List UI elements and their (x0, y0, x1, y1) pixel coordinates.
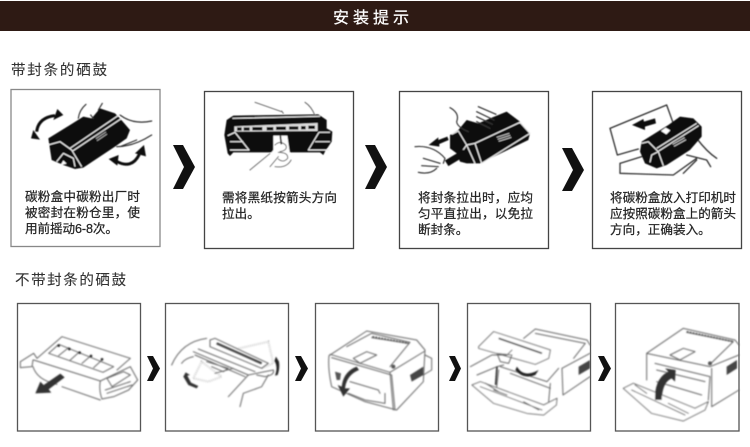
arrow (147, 356, 160, 381)
icon: placing cartridge into printer (610, 105, 717, 175)
arrow (562, 148, 584, 191)
text: step 3: 将封条拉出时，应均 (418, 190, 533, 205)
icon: shaking cartridge (31, 103, 152, 169)
panel: step 3 pull seal (400, 92, 548, 248)
panel: drum step 2 (166, 304, 288, 431)
text: step 1: 被密封在粉仓里，使 (25, 205, 140, 220)
icon: removing drum from printer (470, 329, 590, 415)
heading: cartridge without seal: 不带封条的硒鼓 (15, 272, 126, 289)
text: step 2 (222, 190, 337, 221)
text: step 3: 匀平直拉出，以免拉 (418, 207, 533, 221)
text: step 2: 拉出。 (222, 207, 260, 221)
arrow (365, 145, 387, 189)
text: step 4: 方向，正确装入。 (610, 222, 711, 237)
icon: cartridge front with paper strip (224, 102, 332, 170)
text: step 1: 碳粉盒中碳粉出厂时 (25, 189, 140, 204)
text: step 4: 将碳粉盒放入打印机时 (610, 190, 736, 205)
text: step 3: 断封条。 (418, 222, 468, 237)
icon: drum cartridge with arrow (20, 337, 138, 400)
panel: drum step 1 (18, 304, 140, 431)
panel: step 2 pull paper (204, 92, 354, 248)
icon: opening printer cover (329, 331, 432, 410)
arrow (449, 356, 461, 381)
text: step 4 (610, 190, 736, 237)
text: step 2: 需将黑纸按箭头方向 (222, 190, 337, 205)
arrow (295, 356, 308, 381)
panel: drum step 3 (316, 304, 438, 431)
title banner: 安装提示 (333, 9, 413, 27)
panel: drum step 5 (616, 304, 739, 431)
arrow (598, 356, 611, 381)
icon: rocking the drum in hands (172, 338, 279, 407)
title banner (0, 1, 750, 31)
icon: pulling seal strip (415, 107, 530, 173)
arrow (173, 145, 195, 189)
text: step 3 (418, 190, 533, 237)
panel: step 4 insert cartridge (592, 92, 742, 248)
text: step 1: 用前摇动6-8次。 (25, 221, 118, 236)
panel: drum step 4 (468, 304, 590, 431)
icon: reinserting drum into printer (623, 328, 739, 421)
panel: step 1 shake (11, 90, 160, 246)
text: step 1 (25, 189, 140, 236)
heading: cartridge with seal: 带封条的硒鼓 (11, 62, 108, 79)
text: step 4: 应按照碳粉盒上的箭头 (610, 206, 736, 221)
